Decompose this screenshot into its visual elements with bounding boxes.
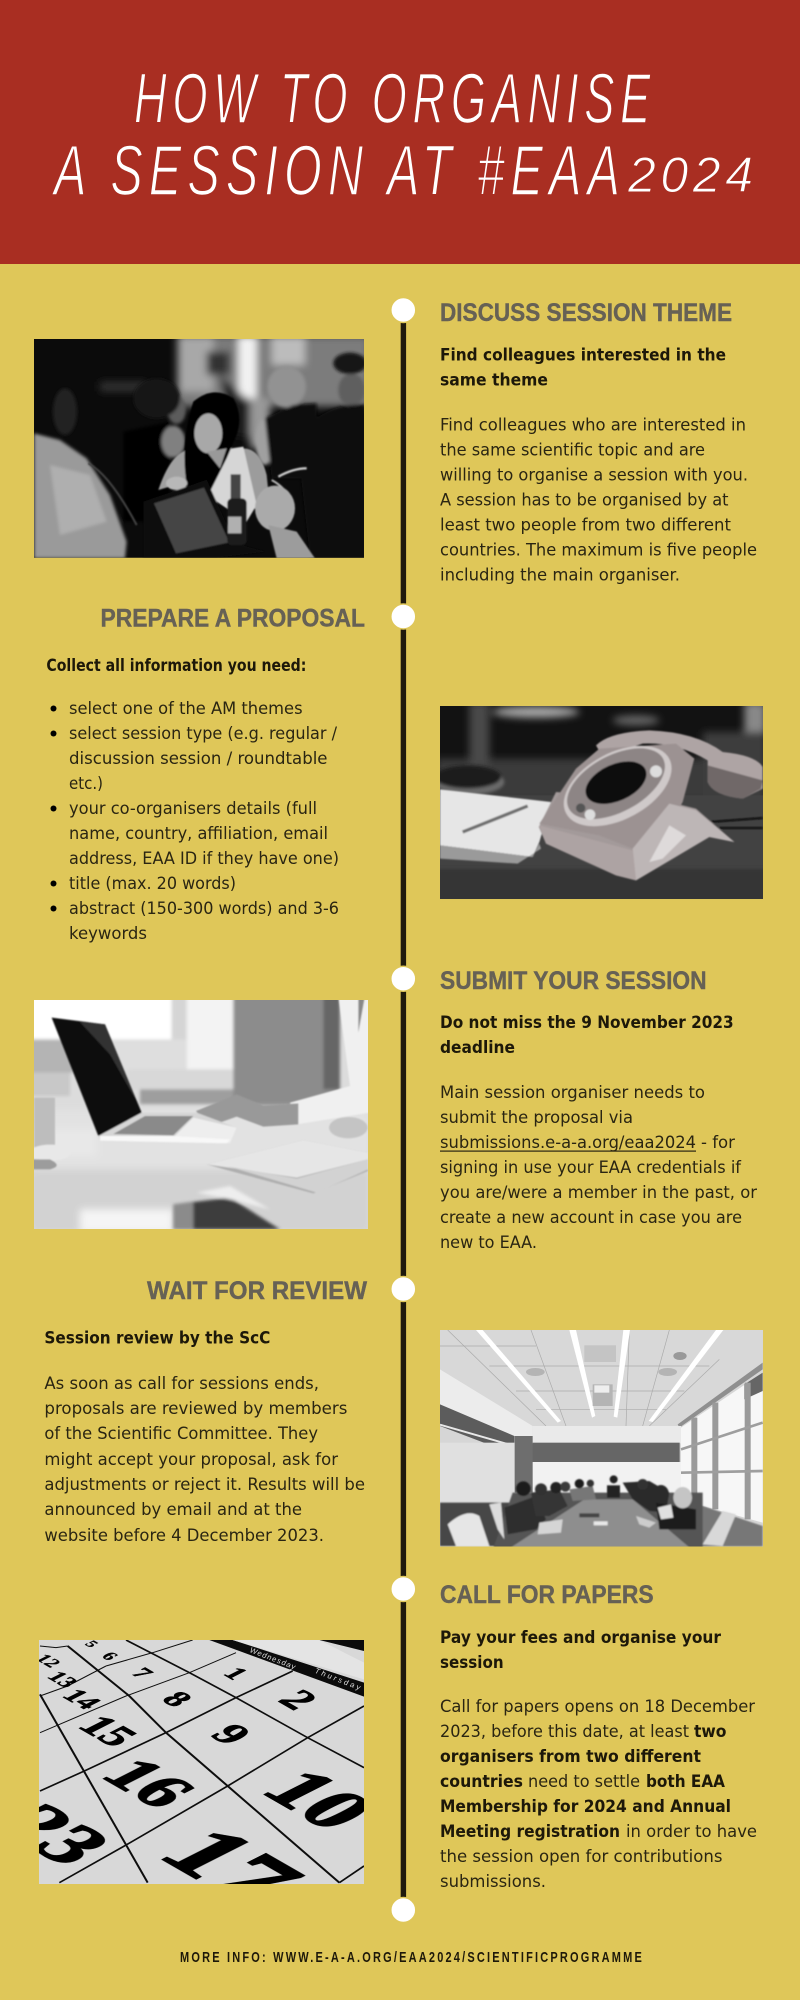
photo: calendar page close-up: Wednesday xyxy=(249,1645,298,1672)
heading: call for papers: CALL FOR PAPERS xyxy=(440,1581,654,1609)
text block: session review xyxy=(44,1328,365,1546)
text block: proposal checklist: etc.) xyxy=(69,774,103,794)
heading: discuss session theme: DISCUSS SESSION THEME xyxy=(440,299,732,327)
title: 2024 xyxy=(627,147,753,203)
text block: call for papers: need to settle xyxy=(528,1772,640,1792)
text block: proposal checklist: select one of the AM themes xyxy=(69,699,303,719)
photo: calendar page close-up: 12 xyxy=(30,1652,65,1670)
photo: calendar page close-up: 13 xyxy=(42,1668,84,1691)
text block: find colleagues: Find colleagues who are interested in xyxy=(440,416,746,436)
text block: proposal checklist: your co-organisers details (full xyxy=(69,799,317,819)
photo: calendar page close-up: 2 xyxy=(268,1684,327,1716)
photo: calendar page close-up: 7 xyxy=(125,1665,159,1682)
text block: find colleagues: Find colleagues interested in the xyxy=(440,346,726,366)
text block: proposal checklist: address, EAA ID if they have one) xyxy=(69,849,339,869)
text block: call for papers: both EAA xyxy=(646,1772,726,1792)
photo: hands typing on a laptop xyxy=(34,1000,368,1229)
text block: find colleagues: A session has to be organised by at xyxy=(440,490,729,510)
text block: submit instructions: Main session organiser needs to xyxy=(440,1083,705,1103)
text block: call for papers: Call for papers opens on 18 December xyxy=(440,1697,755,1717)
photo: calendar page close-up: 6 xyxy=(97,1649,123,1663)
text block: call for papers: organisers from two different xyxy=(440,1747,701,1767)
photo: rotary telephone on a desk xyxy=(440,706,763,899)
text block: submit instructions: create a new account in case you are xyxy=(440,1208,742,1228)
text block: call for papers xyxy=(440,1628,757,1892)
text block: proposal checklist: discussion session / roundtable xyxy=(69,749,328,769)
title xyxy=(51,60,753,211)
text block: call for papers: Pay your fees and organise your xyxy=(440,1628,722,1648)
text block: session review: proposals are reviewed by members xyxy=(44,1399,348,1419)
text block: proposal checklist xyxy=(46,656,339,944)
text block: call for papers: session xyxy=(440,1653,504,1673)
text block: submit instructions: you are/were a member in the past, or xyxy=(440,1183,757,1203)
text block: session review: of the Scientific Committee. They xyxy=(44,1424,318,1444)
text block: call for papers: Membership for 2024 and Annual xyxy=(440,1797,731,1817)
text block: find colleagues: willing to organise a session with you. xyxy=(440,466,748,486)
text block: submit instructions: Do not miss the 9 November 2023 xyxy=(440,1013,734,1033)
header band xyxy=(0,0,800,264)
text block: submit instructions: new to EAA. xyxy=(440,1233,537,1253)
text block: call for papers: countries xyxy=(440,1772,523,1792)
text block: proposal checklist: title (max. 20 words) xyxy=(69,874,236,894)
photo: calendar page close-up: 14 xyxy=(55,1685,107,1713)
text block: call for papers: in order to have xyxy=(626,1822,757,1842)
photo: calendar page close-up: 16 xyxy=(86,1748,213,1817)
text block: session review: As soon as call for sessions ends, xyxy=(44,1374,319,1394)
photo: calendar page close-up xyxy=(0,1639,395,1917)
text block: submit instructions: submissions.e-a-a.org/eaa2024 xyxy=(440,1133,696,1153)
photo: calendar page close-up: 1 xyxy=(217,1663,255,1683)
text block: session review: might accept your proposal, ask for xyxy=(44,1450,338,1470)
text block: call for papers: submissions. xyxy=(440,1872,546,1892)
photo: calendar page close-up: 15 xyxy=(67,1709,148,1753)
photo: conference room meeting xyxy=(440,1330,763,1546)
footer link: MORE INFO: WWW.E-A-A.ORG/EAA2024/SCIENTIFICPROGRAMME xyxy=(180,1949,644,1966)
text block: submit instructions: submit the proposal via xyxy=(440,1108,633,1128)
text block: proposal checklist: Collect all information you need: xyxy=(46,656,306,676)
text block: submit instructions xyxy=(440,1013,757,1253)
text block: call for papers: two xyxy=(694,1722,726,1742)
text block: find colleagues xyxy=(440,346,757,586)
text block: submit instructions: deadline xyxy=(440,1038,515,1058)
photo: people talking at a table xyxy=(34,339,364,558)
text block: find colleagues: the same scientific topic and are xyxy=(440,440,705,460)
text block: call for papers: the session open for contributions xyxy=(440,1847,723,1867)
heading: prepare a proposal: PREPARE A PROPOSAL xyxy=(100,604,365,632)
text block: proposal checklist: name, country, affiliation, email xyxy=(69,824,328,844)
text block: proposal checklist: abstract (150-300 words) and 3-6 xyxy=(69,899,339,919)
text block: call for papers: 2023, before this date, at least xyxy=(440,1722,689,1742)
photo: calendar page close-up: 17 xyxy=(135,1815,327,1917)
text block: find colleagues: same theme xyxy=(440,370,548,390)
text block: session review: adjustments or reject it. Results will be xyxy=(44,1475,365,1495)
text block: proposal checklist: select session type (e.g. regular / xyxy=(69,724,337,744)
text block: call for papers: Meeting registration xyxy=(440,1822,620,1842)
text block: find colleagues: including the main organiser. xyxy=(440,566,680,586)
text block: session review: announced by email and at the xyxy=(44,1500,302,1520)
photo: calendar page close-up: Thursday xyxy=(314,1666,363,1692)
text block: submit instructions: signing in use your EAA credentials if xyxy=(440,1158,742,1178)
photo: calendar page close-up: 9 xyxy=(200,1718,262,1751)
text block: session review: Session review by the ScC xyxy=(44,1328,270,1348)
text block: session review: website before 4 December 2023. xyxy=(44,1526,324,1546)
photo: calendar page close-up: 5 xyxy=(81,1639,101,1650)
photo: calendar page close-up: 8 xyxy=(154,1687,200,1712)
timeline xyxy=(391,298,416,1922)
photo: calendar page close-up: 10 xyxy=(243,1758,395,1840)
text block: find colleagues: least two people from two different xyxy=(440,516,731,536)
heading: wait for review: WAIT FOR REVIEW xyxy=(147,1277,367,1305)
text block: submit instructions: - for xyxy=(701,1133,735,1153)
text block: proposal checklist: keywords xyxy=(69,924,147,944)
text block: find colleagues: countries. The maximum is five people xyxy=(440,540,757,560)
heading: submit your session: SUBMIT YOUR SESSION xyxy=(440,967,707,995)
